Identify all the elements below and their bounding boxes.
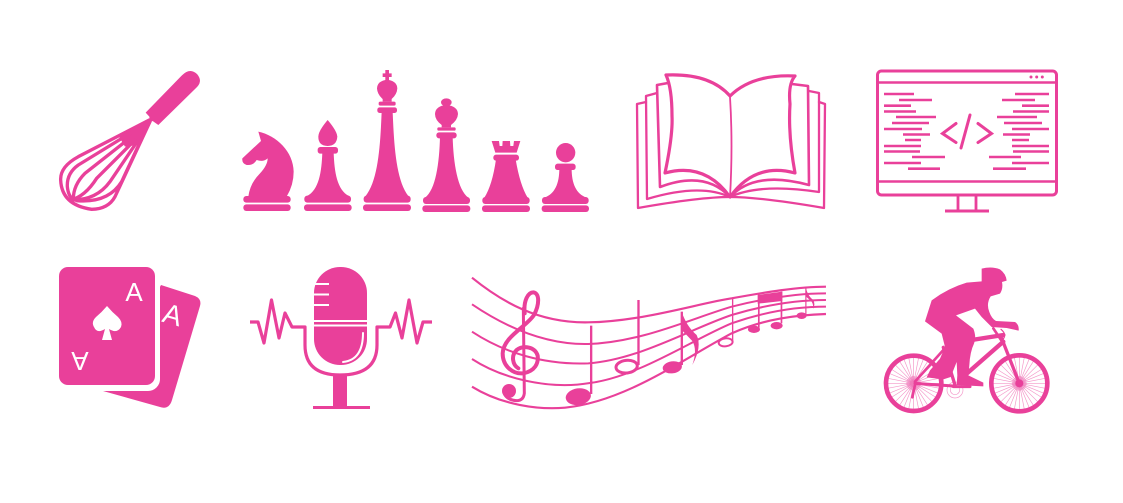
rider silhouette xyxy=(925,267,1019,386)
chess bishop xyxy=(304,120,352,211)
icon: whisk xyxy=(61,71,200,209)
icon: playing cards: A xyxy=(125,277,143,307)
icon: playing cards: A xyxy=(159,297,186,332)
bicycle wheels xyxy=(886,355,1047,411)
icon: cyclist xyxy=(886,267,1047,411)
chess queen xyxy=(422,98,470,212)
icon: code monitor xyxy=(878,71,1056,211)
chess rook xyxy=(482,141,530,212)
chess pawn xyxy=(542,143,589,212)
staff lines xyxy=(472,278,826,408)
icon: chess pieces xyxy=(242,70,589,212)
chess king xyxy=(363,70,411,211)
icon: playing cards: A xyxy=(71,346,89,376)
icon: music staff with notes xyxy=(472,278,826,408)
chess knight xyxy=(242,132,294,211)
icon: open book xyxy=(637,75,825,208)
icon: playing cards xyxy=(50,260,200,408)
icon: microphone with sound waves xyxy=(250,267,432,409)
note heads and stems xyxy=(565,288,814,407)
bicycle frame xyxy=(912,328,1019,397)
treble clef xyxy=(502,292,538,401)
